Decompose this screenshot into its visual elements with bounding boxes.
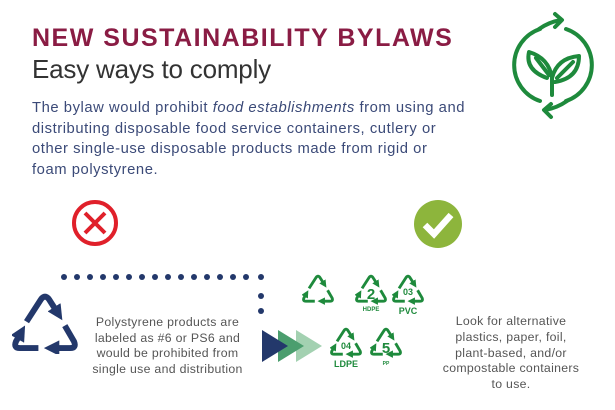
dotted connector [61, 274, 264, 314]
intro text: distributing disposable food service containers, cutlery or [32, 120, 436, 136]
green recycling symbols: PP [383, 361, 389, 367]
green recycling symbols: 5 [382, 340, 390, 357]
intro text: The bylaw would prohibit food establishments from using and [32, 100, 465, 116]
title: NEW SUSTAINABILITY BYLAWS [32, 24, 453, 52]
intro text: other single-use disposable products made from rigid or [32, 141, 427, 157]
green recycling symbols [302, 274, 424, 369]
icon: leaf recycle [512, 12, 594, 120]
intro text: foam polystyrene. [32, 162, 158, 178]
subtitle: Easy ways to comply [32, 54, 271, 84]
green recycling symbols: HDPE [363, 307, 379, 313]
green recycling symbols: 03 [403, 287, 413, 297]
icon: navy recycle [12, 294, 78, 354]
alternatives text: Look for alternative plastics, paper, foil, plant-based, and/or compostable containers to use. [443, 314, 579, 391]
intro text [32, 100, 465, 178]
green recycling symbols: PVC [399, 306, 417, 316]
icon: green check [414, 200, 462, 248]
green recycling symbols: 2 [367, 286, 375, 303]
icon: red x [72, 200, 118, 246]
arrows [262, 330, 322, 362]
polystyrene text: Polystyrene products are labeled as #6 or PS6 and would be prohibited from single use and distribution [92, 315, 243, 376]
green recycling symbols: 04 [341, 341, 351, 351]
green recycling symbols: LDPE [334, 359, 358, 369]
